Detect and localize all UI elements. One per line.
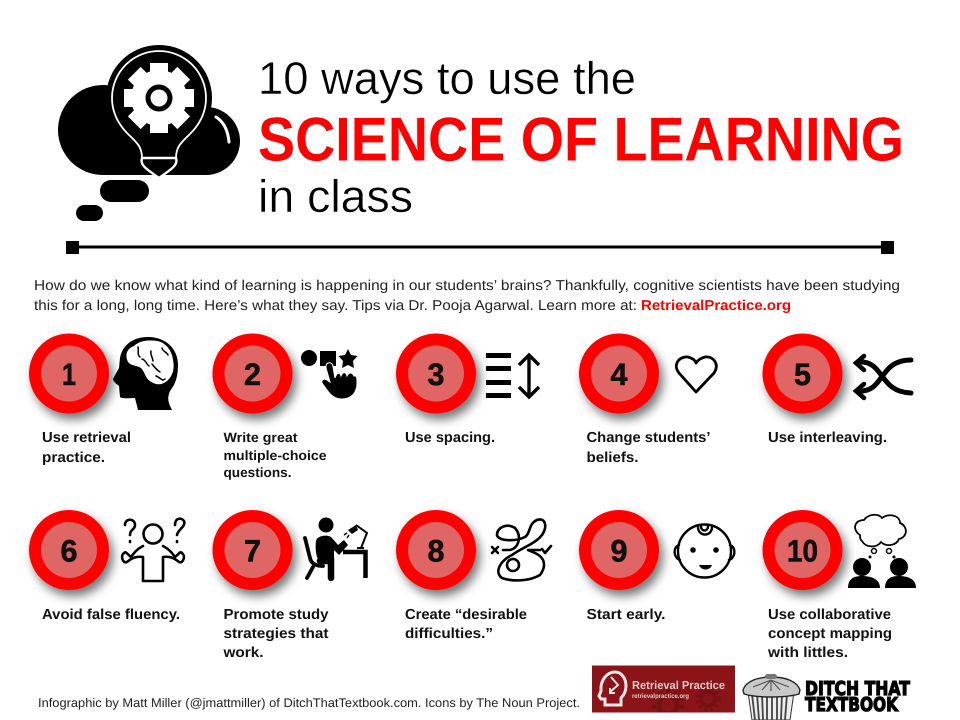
tip 4 label: Change students’ [586,430,710,446]
logo: Ditch That Textbook: TEXTBOOK [805,694,899,716]
tip 7 label: Promote study [224,607,328,623]
tip 2: number badge: 2 [244,357,261,392]
intro paragraph: RetrievalPractice.org [641,298,791,314]
divider with end squares [66,241,894,254]
tip 10 label: concept mapping [768,626,892,642]
tip 7 label: work. [222,645,264,661]
tip 2 label: questions. [224,465,292,480]
logo: Ditch That Textbook [743,674,910,720]
tip 6: number badge: 6 [60,534,78,568]
tip 8 label [405,607,527,642]
tip 6: number badge [29,510,109,590]
tip 2 label: multiple-choice [224,448,327,463]
title: SCIENCE OF LEARNING [258,106,904,174]
tip 1 label: practice. [42,450,105,466]
tip 10 label: with littles. [767,645,848,661]
tip 3 label: Use spacing. [405,430,495,446]
logo: Retrieval Practice: retrievalpractice.org [632,693,689,700]
tip 10: number badge: 10 [787,534,818,568]
tip 6 label: Avoid false fluency. [42,607,180,623]
logo: Retrieval Practice [592,666,735,712]
tip 1: number badge [29,334,109,414]
icon: shuffle arrows [856,356,911,398]
tip 10: number badge [762,510,842,590]
icon: head with brain [113,337,178,410]
intro paragraph: How do we know what kind of learning is happening in our students’ brains? Thankfully, cognitive scientists have been studying [34,278,900,294]
icon: heart outline [676,357,716,392]
logo: Ditch That Textbook: DITCH THAT [805,678,910,700]
tip 5: number badge [762,334,842,414]
tip 7 label [222,607,329,661]
tip 1 label: Use retrieval [42,430,131,446]
tip 4 label: beliefs. [586,450,638,466]
tip 2 label: Write great [224,430,298,445]
tip 9: number badge: 9 [610,534,628,568]
icon: tangled path from x to check [492,519,551,580]
title: in class [258,170,413,222]
tip 2 label [224,430,327,480]
tip 5: number badge: 5 [794,357,811,392]
tip 1: number badge: 1 [62,357,76,392]
icon: baby face [675,524,734,578]
tip 2: number badge [212,334,292,414]
tip 9 label: Start early. [586,607,666,623]
tip 8 label: Create “desirable [405,607,527,623]
tip 7 label: strategies that [224,626,329,642]
tip 4: number badge [579,334,659,414]
icon: cloud with lightbulb and gear [58,45,240,221]
tip 4: number badge: 4 [610,357,628,392]
tip 5 label: Use interleaving. [768,430,887,446]
tip 9: number badge [579,510,659,590]
tip 7: number badge [212,510,292,590]
tip 4 label [586,430,710,466]
tip 10 label: Use collaborative [768,607,891,623]
intro paragraph: this for a long, long time. Here’s what they say. Tips via Dr. Pooja Agarwal. Learn more at: [34,298,637,314]
title [258,52,904,222]
tip 1 label [42,430,131,466]
tip 8 label: difficulties.” [405,626,493,642]
intro paragraph [34,278,900,314]
icon: spacing lines and arrow [486,353,539,398]
tip 3: number badge [396,334,476,414]
title: 10 ways to use the [258,52,636,104]
tip 8: number badge [396,510,476,590]
tip 3: number badge: 3 [428,357,444,392]
icon: hand choosing shapes [301,349,358,399]
tip 8: number badge: 8 [428,534,444,568]
tip 10 label [767,607,892,661]
credit line: Infographic by Matt Miller (@jmattmiller) of DitchThatTextbook.com. Icons by The Noun Project. [38,696,580,710]
icon: confused person with question marks [122,519,184,581]
tip 7: number badge: 7 [244,534,261,568]
logo: Retrieval Practice: Retrieval Practice [632,680,725,692]
icon: person studying at desk [305,518,367,578]
icon: two people sharing a thought cloud [848,515,916,588]
